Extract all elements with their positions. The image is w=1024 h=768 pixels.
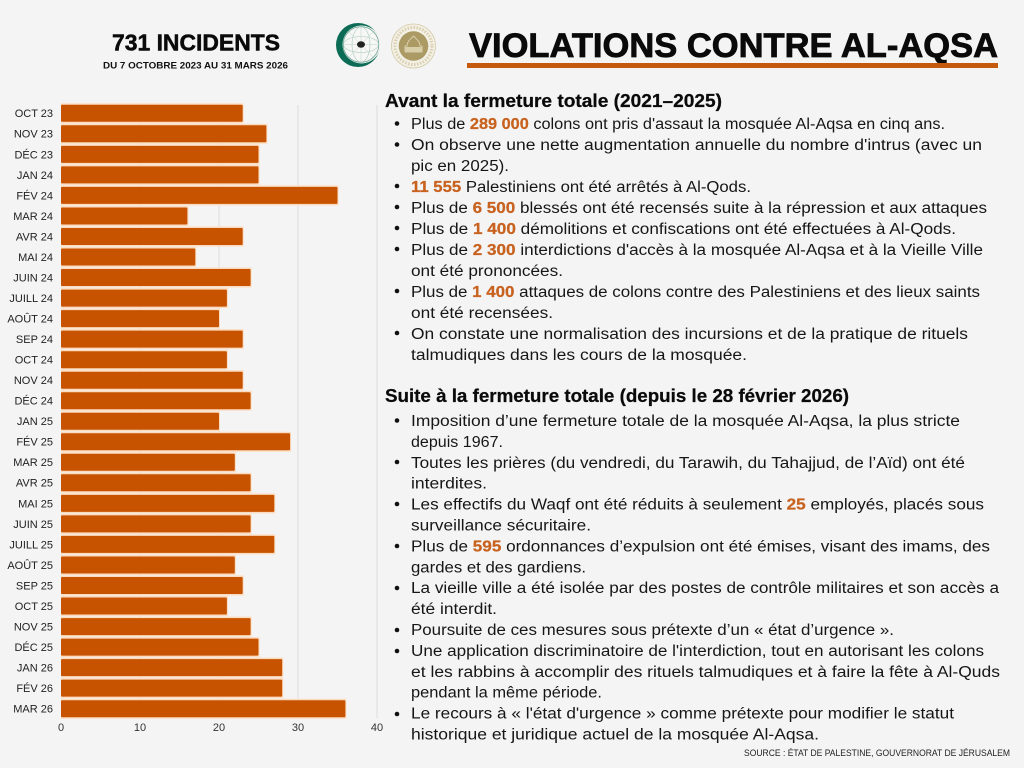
- list: before closure: On observe une nette augmentation annuelle du nombre d'intrus (avec un: [411, 137, 982, 154]
- section: after total closure: [385, 386, 1000, 744]
- month labels: JUIN 24: [13, 272, 53, 284]
- month labels: MAI 24: [18, 252, 53, 264]
- list: before closure: Plus de 6 500 blessés ont été recensés suite à la répression et aux attaques: [411, 200, 987, 217]
- month labels: FÉV 24: [16, 189, 53, 202]
- main title: VIOLATIONS CONTRE AL-AQSA: [469, 27, 998, 65]
- x axis labels: 40: [371, 722, 383, 734]
- list: after closure: interdites.: [411, 476, 487, 493]
- list: after closure: Une application discriminatoire de l'interdiction, tout en autorisant les colons: [411, 643, 984, 660]
- month labels: OCT 23: [15, 108, 53, 120]
- month labels: DÉC 24: [14, 395, 53, 408]
- chart bars: [61, 103, 346, 719]
- x axis labels: [58, 722, 383, 734]
- list: before closure: Plus de 1 400 démolitions et confiscations ont été effectuées à Al-Qods.: [411, 221, 956, 238]
- list: before closure: [395, 116, 987, 364]
- list: after closure: Le recours à « l'état d'urgence » comme prétexte pour modifier le statut: [411, 706, 955, 723]
- month labels: NOV 23: [14, 129, 53, 141]
- list: before closure: On constate une normalisation des incursions et de la pratique de rituels: [411, 326, 968, 343]
- list: after closure: Toutes les prières (du vendredi, du Tarawih, du Tahajjud, de l’Aïd) ont été: [411, 455, 965, 472]
- month labels: FÉV 25: [16, 436, 53, 449]
- list: after closure: historique et juridique actuel de la mosquée Al-Aqsa.: [411, 726, 819, 744]
- list: after closure: [395, 413, 1000, 744]
- month labels: MAR 26: [13, 704, 53, 716]
- list: before closure: Plus de 289 000 colons ont pris d'assaut la mosquée Al-Aqsa en cinq ans.: [411, 116, 945, 133]
- list: after closure: Les effectifs du Waqf ont été réduits à seulement 25 employés, placés sous: [411, 497, 984, 514]
- x axis labels: 30: [292, 722, 304, 734]
- heading: before closure: Avant la fermeture totale (2021–2025): [385, 91, 722, 111]
- month labels: OCT 25: [15, 601, 53, 613]
- list: before closure: pic en 2025).: [411, 158, 509, 175]
- month labels: JUILL 25: [9, 539, 53, 551]
- list: after closure: pendant la même période.: [411, 685, 602, 702]
- list: after closure: Plus de 595 ordonnances d’expulsion ont été émises, visant des imams, des: [411, 538, 990, 555]
- list: after closure: et les rabbins à accomplir des rituels talmudiques et à faire la fête à Al-Quds: [411, 664, 1000, 681]
- month labels: MAR 24: [13, 211, 53, 223]
- month labels: SEP 24: [16, 334, 53, 346]
- month labels: SEP 25: [16, 580, 53, 592]
- list: before closure: Plus de 1 400 attaques de colons contre des Palestiniens et des lieux saints: [411, 284, 980, 301]
- month labels: JAN 26: [17, 662, 53, 674]
- month labels: NOV 25: [14, 622, 53, 634]
- month labels: AVR 24: [16, 231, 53, 243]
- month labels: JAN 25: [17, 416, 53, 428]
- month labels: JUIN 25: [13, 519, 53, 531]
- list: before closure: 11 555 Palestiniens ont été arrêtés à Al-Qods.: [411, 179, 751, 196]
- list: after closure: La vieille ville a été isolée par des postes de contrôle militaires et son accès a: [411, 580, 999, 597]
- list: before closure: ont été recensées.: [411, 305, 553, 322]
- section: before total closure: [385, 91, 987, 364]
- month labels: [7, 108, 53, 716]
- list: before closure: ont été prononcées.: [411, 263, 563, 280]
- month labels: JAN 24: [17, 170, 53, 182]
- month labels: DÉC 25: [14, 641, 53, 654]
- month labels: AVR 25: [16, 478, 53, 490]
- month labels: AOÛT 25: [7, 559, 53, 572]
- month labels: OCT 24: [15, 355, 53, 367]
- list: after closure: Imposition d’une fermeture totale de la mosquée Al-Aqsa, la plus stricte: [411, 413, 960, 430]
- list: before closure: Plus de 2 300 interdictions d'accès à la mosquée Al-Aqsa et à la Vieille Ville: [411, 242, 983, 259]
- month labels: JUILL 24: [9, 293, 53, 305]
- x axis labels: 20: [213, 722, 225, 734]
- bar chart: monthly incidents: [7, 103, 383, 734]
- date range subtitle: DU 7 OCTOBRE 2023 AU 31 MARS 2026: [103, 60, 288, 72]
- x axis labels: 0: [58, 722, 64, 734]
- icon: OIC logo: [336, 23, 380, 67]
- list: after closure: été interdit.: [411, 601, 497, 618]
- list: after closure: Poursuite de ces mesures sous prétexte d’un « état d’urgence ».: [411, 622, 894, 639]
- month labels: MAI 25: [18, 498, 53, 510]
- headline: 731 incidents: 731 INCIDENTS: [112, 30, 280, 56]
- title underline: [467, 63, 998, 68]
- month labels: DÉC 23: [14, 148, 53, 161]
- list: after closure: gardes et des gardiens.: [411, 559, 586, 576]
- list: after closure: depuis 1967.: [411, 434, 503, 451]
- month labels: NOV 24: [14, 375, 53, 387]
- month labels: AOÛT 24: [7, 312, 53, 326]
- list: before closure: talmudiques dans les cours de la mosquée.: [411, 347, 747, 364]
- x axis labels: 10: [134, 722, 146, 734]
- icon: Jerusalem governorate seal: [392, 24, 436, 68]
- month labels: MAR 25: [13, 457, 53, 469]
- list: after closure: surveillance sécuritaire.: [411, 518, 591, 534]
- heading: after closure: Suite à la fermeture totale (depuis le 28 février 2026): [385, 386, 849, 406]
- month labels: FÉV 26: [16, 682, 53, 695]
